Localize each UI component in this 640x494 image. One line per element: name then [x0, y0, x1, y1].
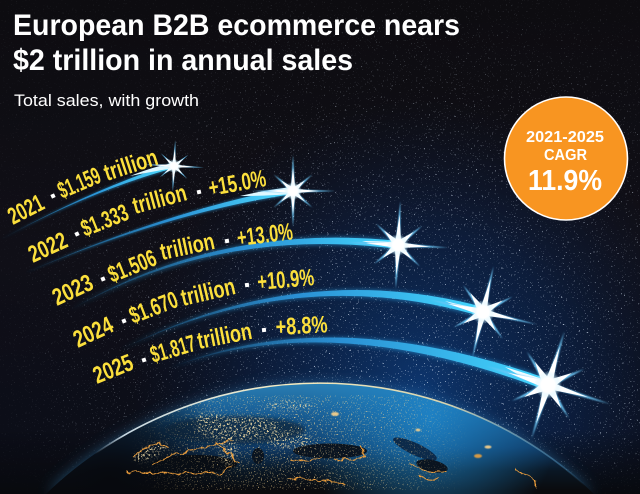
scattered city lights — [130, 395, 490, 490]
label 2024: +10.9% — [256, 264, 315, 296]
star 2021 — [143, 138, 205, 194]
label 2025: 2025 — [89, 349, 137, 390]
label 2022: +15.0% — [206, 165, 268, 202]
label 2021: 2021 — [3, 189, 49, 230]
label 2022: $1.333 — [77, 199, 133, 243]
dense European city lights — [132, 396, 316, 466]
CAGR badge: 11.9% — [528, 165, 602, 197]
label 2023: trillion — [158, 228, 217, 266]
star 2025 — [469, 312, 627, 458]
label 2022: trillion — [130, 179, 190, 220]
label 2024: $1.670 — [125, 286, 182, 330]
label 2025: trillion — [195, 318, 254, 355]
label 2021: $1.159 — [54, 162, 105, 205]
subtitle: Total sales, with growth — [14, 91, 199, 110]
lit coastlines — [128, 441, 538, 486]
label 2023 — [48, 218, 294, 311]
title line two: $2 trillion in annual sales — [13, 44, 353, 77]
label 2023: +13.0% — [235, 218, 294, 252]
star 2022 — [251, 155, 335, 227]
CAGR badge: CAGR — [544, 147, 587, 164]
label 2023: 2023 — [48, 269, 98, 311]
label 2024 — [69, 264, 315, 353]
label 2021 — [3, 144, 161, 230]
star 2023 — [346, 198, 450, 292]
streak 2023 — [70, 237, 398, 310]
CAGR badge — [504, 97, 628, 220]
label 2024: 2024 — [69, 311, 118, 353]
streak 2025 — [170, 337, 548, 392]
dark seas — [162, 438, 448, 473]
bright city clusters — [331, 412, 492, 458]
streak 2021 — [0, 162, 174, 240]
label 2022: 2022 — [24, 227, 72, 268]
label 2024: trillion — [178, 273, 238, 312]
label 2021: trillion — [101, 144, 161, 187]
streak 2022 — [25, 186, 293, 273]
label 2022 — [24, 165, 268, 268]
atmosphere rim — [46, 383, 594, 494]
label 2025: +8.8% — [275, 311, 328, 341]
label 2023: $1.506 — [104, 245, 161, 289]
globe: Europe at night — [46, 376, 594, 494]
title: European B2B ecommerce nears — [13, 9, 460, 42]
land tint — [165, 416, 305, 444]
label 2025: $1.817 — [147, 330, 199, 369]
label 2025 — [89, 311, 328, 390]
CAGR badge: 2021-2025 — [526, 129, 604, 146]
streak 2024 — [120, 290, 483, 350]
star 2024 — [419, 254, 547, 370]
